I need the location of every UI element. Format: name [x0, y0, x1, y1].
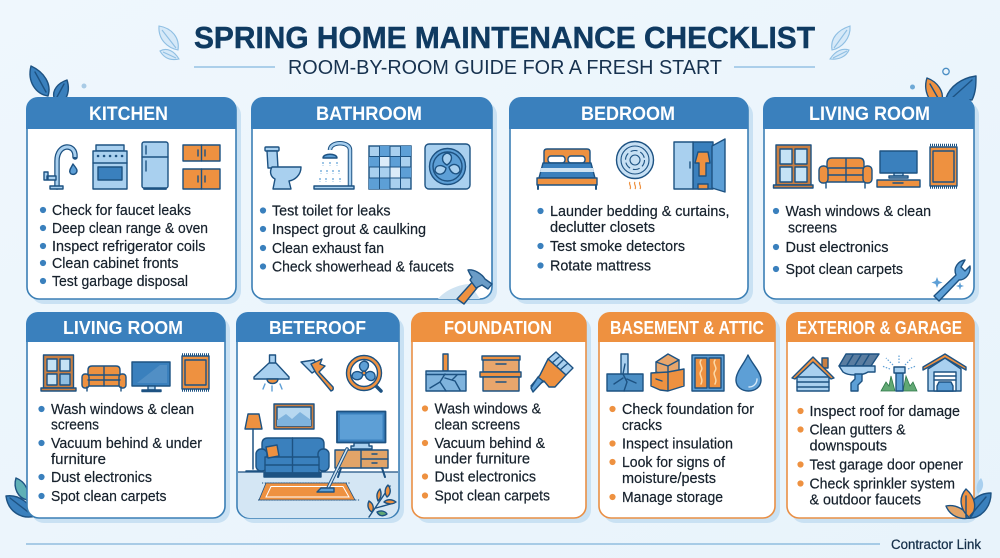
checklist: basement and attic: Check foundation for [622, 402, 754, 418]
panel: bathroom [251, 97, 497, 304]
checklist: foundation: clean screens [434, 418, 520, 434]
checklist: foundation: Vacuum behind & [434, 436, 545, 452]
icon: water drop [736, 355, 761, 391]
icon: exhaust fan [425, 144, 470, 189]
icon: tiles [369, 146, 411, 189]
icon: rug [930, 145, 957, 188]
icon: cabinets [183, 145, 220, 189]
icon: insulation window [692, 355, 724, 391]
icon: window [774, 145, 813, 188]
scene: living room illustration [238, 404, 398, 518]
icon: floor lamp [245, 414, 262, 471]
checklist: bathroom: Check showerhead & faucets [272, 260, 454, 276]
icon: blue leaves top left [30, 66, 68, 98]
checklist: living room top: screens [788, 220, 837, 236]
icon: vacuum [317, 449, 347, 492]
panel: living room bottom [26, 312, 230, 523]
checklist: bathroom [260, 204, 454, 276]
checklist: exterior and garage: Clean gutters & [810, 422, 906, 438]
icon: bed [537, 149, 597, 189]
checklist: living room bottom: Vacuum behind & under [51, 436, 202, 452]
icon: range hood [254, 355, 289, 391]
icon: smoke detector [616, 142, 654, 189]
panel: living room top [763, 97, 979, 304]
panel: bedroom [509, 97, 753, 304]
panel: exterior and garage [786, 312, 979, 523]
footer rule [26, 543, 880, 545]
checklist: exterior and garage: Test garage door opener [810, 458, 963, 474]
checklist: living room bottom [38, 402, 202, 505]
checklist: living room top [773, 204, 931, 278]
icon: cardboard boxes [651, 354, 684, 391]
heading: basement and attic: BASEMENT & ATTIC [610, 318, 764, 338]
panel: beteroof [236, 312, 404, 523]
icon: tv [877, 151, 920, 187]
checklist: exterior and garage: Check sprinkler system [810, 476, 955, 492]
icon: refrigerator [142, 142, 168, 189]
icon: round fan [346, 356, 382, 391]
checklist: basement and attic: cracks [622, 418, 662, 434]
checklist: bathroom: Test toilet for leaks [272, 204, 390, 220]
checklist: exterior and garage [797, 404, 963, 508]
icon: dot top left [82, 84, 86, 88]
checklist: exterior and garage: & outdoor faucets [810, 492, 921, 508]
heading: foundation: FOUNDATION [444, 318, 552, 338]
icon: floor rug [258, 483, 360, 500]
icon: sofa [819, 158, 872, 188]
icon: window [41, 355, 76, 391]
checklist: living room top: Wash windows & clean [786, 204, 931, 220]
checklist: bedroom: declutter closets [550, 220, 655, 236]
heading: beteroof: BETEROOF [269, 318, 366, 338]
checklist: basement and attic: Look for signs of [622, 455, 726, 471]
icon: closet [674, 139, 725, 192]
checklist: bathroom: Inspect grout & caulking [272, 222, 426, 238]
checklist: kitchen: Inspect refrigerator coils [52, 239, 206, 255]
checklist: foundation: under furniture [434, 452, 530, 468]
icon: toilet [265, 147, 301, 189]
icon: tv console [335, 450, 388, 477]
heading: bedroom: BEDROOM [581, 104, 675, 125]
checklist: bedroom: Rotate mattress [550, 258, 651, 274]
checklist: exterior and garage: Inspect roof for damage [810, 404, 960, 420]
icon: shower [314, 143, 354, 189]
icon: blue sofa [256, 438, 329, 477]
icon: gutter and downspout [839, 354, 879, 391]
heading: exterior and garage: EXTERIOR & GARAGE [797, 318, 962, 338]
checklist: foundation: Wash windows & [434, 402, 541, 418]
checklist: bathroom: Clean exhaust fan [272, 241, 384, 257]
heading: living room: LIVING ROOM [809, 104, 930, 125]
checklist: kitchen: Deep clean range & oven [52, 221, 208, 237]
icon: leaves bottom right [946, 478, 991, 518]
checklist: kitchen [40, 203, 208, 290]
checklist: living room bottom: Dust electronics [51, 470, 152, 486]
checklist: basement and attic: Inspect insulation [622, 436, 733, 452]
icon: ring top right [943, 68, 949, 75]
icon: house [792, 357, 834, 391]
checklist: kitchen: Check for faucet leaks [52, 203, 191, 219]
checklist: living room bottom: furniture [51, 452, 106, 468]
checklist: kitchen: Test garbage disposal [52, 274, 188, 290]
icon: garage [923, 354, 966, 391]
checklist: living room bottom: Spot clean carpets [51, 489, 166, 505]
icon: cracked foundation [426, 354, 466, 391]
icon: hammer [438, 270, 492, 304]
heading: bathroom: BATHROOM [316, 104, 422, 125]
icon: paintbrush [531, 352, 573, 392]
icon: scraper tool [301, 359, 333, 391]
icon: outline leaves left of title [159, 26, 179, 60]
icon: range and oven [93, 145, 127, 189]
checklist: exterior and garage: downspouts [810, 438, 887, 454]
heading: living room: LIVING ROOM [63, 318, 183, 338]
checklist: living room bottom: screens [51, 418, 99, 434]
icon: rug [182, 354, 209, 390]
icon: outline leaves right of title [830, 26, 850, 59]
checklist: kitchen: Clean cabinet fronts [52, 256, 178, 272]
panel: foundation [411, 312, 591, 523]
icon: sprinkler [881, 355, 917, 391]
icon: plant [368, 485, 396, 517]
title: SPRING HOME MAINTENANCE CHECKLIST [194, 20, 815, 55]
icon: leaves bottom left [6, 478, 36, 517]
panel: kitchen [26, 97, 241, 304]
footer: brand: Contractor Link [891, 537, 981, 552]
icon: wall picture [274, 404, 314, 429]
checklist: living room bottom: Wash windows & clean [51, 402, 194, 418]
subtitle: ROOM-BY-ROOM GUIDE FOR A FRESH START [288, 56, 722, 79]
checklist: living room top: Dust electronics [786, 240, 888, 256]
icon: storage boxes [480, 356, 521, 391]
checklist: bedroom [537, 204, 730, 274]
icon: large tv [337, 412, 386, 449]
icon: leaves top right [926, 76, 976, 100]
icon: foundation crack [607, 354, 643, 391]
checklist: basement and attic: Manage storage [622, 490, 723, 506]
checklist: bedroom: Test smoke detectors [550, 239, 685, 255]
checklist: basement and attic [609, 402, 754, 506]
checklist: bedroom: Launder bedding & curtains, [550, 204, 730, 220]
icon: wrench and sparkles [932, 260, 970, 301]
checklist: foundation: Spot clean carpets [434, 488, 550, 504]
icon: faucet [44, 147, 77, 189]
icon: sofa [82, 366, 126, 391]
heading: kitchen: KITCHEN [89, 104, 168, 125]
panel: basement and attic [598, 312, 780, 523]
checklist: basement and attic: moisture/pests [622, 471, 716, 487]
icon: dot top right [910, 84, 915, 90]
checklist: foundation [422, 402, 550, 504]
icon: tv [132, 362, 170, 392]
checklist: living room top: Spot clean carpets [786, 262, 903, 278]
checklist: foundation: Dust electronics [434, 470, 536, 486]
